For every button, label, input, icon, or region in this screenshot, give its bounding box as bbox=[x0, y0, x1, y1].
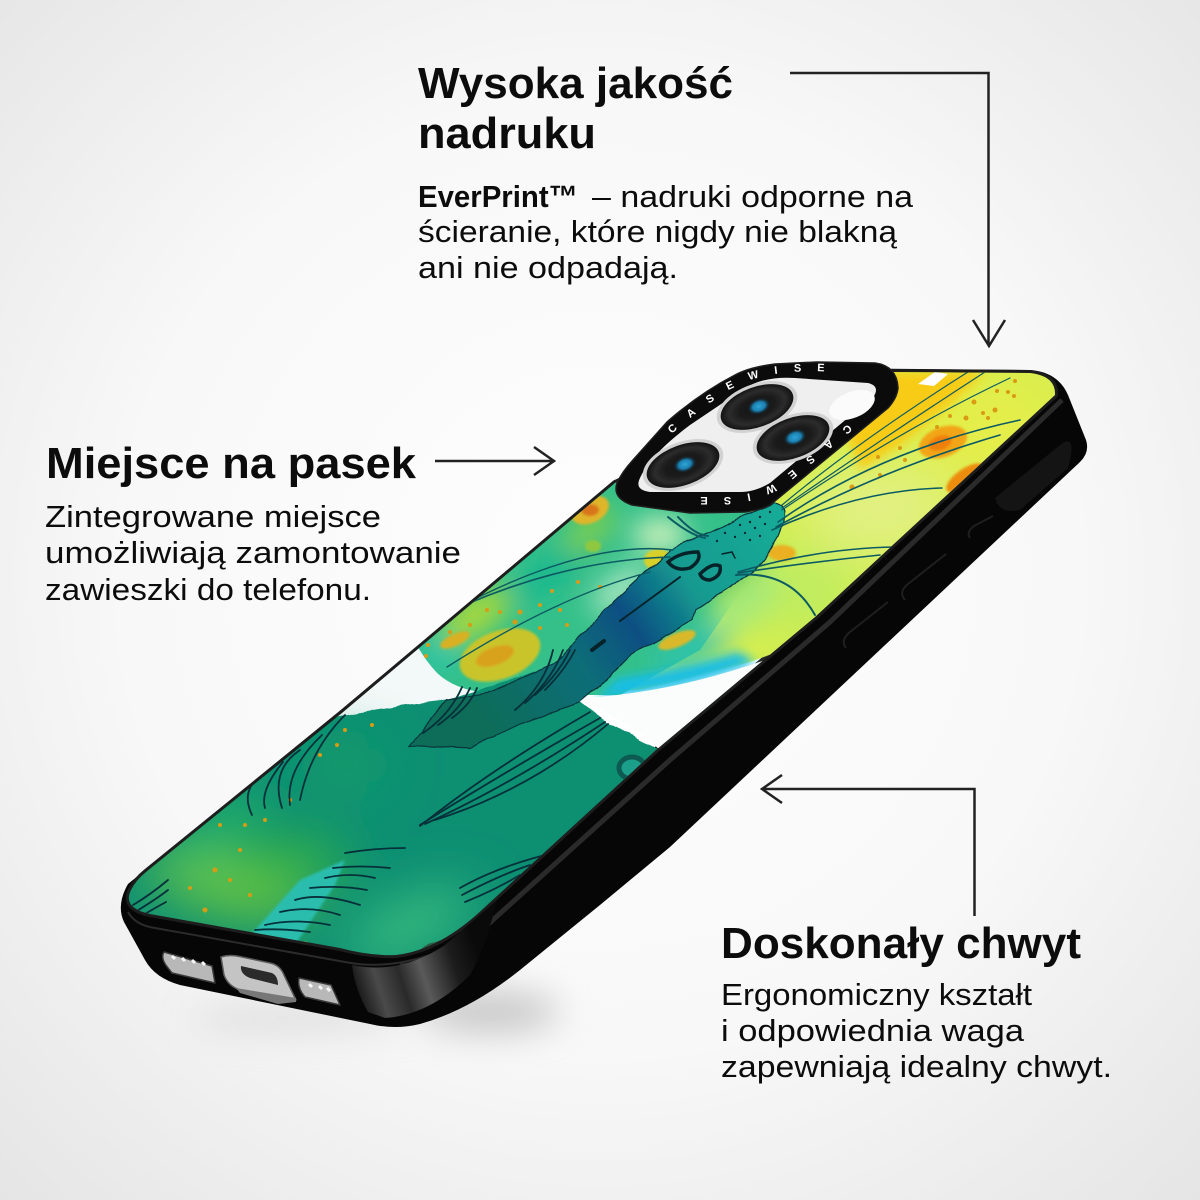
cat eyes and snout bbox=[592, 552, 735, 650]
description: – nadruki odporne na bbox=[592, 179, 914, 214]
eye spot in body bbox=[619, 757, 645, 779]
bottom face edge bbox=[128, 912, 430, 965]
phone bbox=[120, 361, 1088, 1027]
description bbox=[45, 499, 461, 607]
orange spots bbox=[438, 419, 988, 692]
top lime area bbox=[629, 372, 1056, 690]
whiskers bbox=[447, 372, 1020, 667]
description: Ergonomiczny kształt bbox=[721, 977, 1032, 1012]
yellow patch bbox=[845, 372, 985, 470]
printed artwork bbox=[120, 365, 1070, 975]
heading bbox=[418, 59, 733, 158]
description: ani nie odpadają. bbox=[418, 250, 678, 285]
phone shadow bbox=[190, 992, 560, 1032]
bumper rim bbox=[129, 372, 1055, 955]
description: umożliwiają zamontowanie bbox=[45, 535, 461, 570]
left speaker bbox=[163, 952, 215, 983]
callout: print quality bbox=[418, 59, 914, 285]
phone case body bbox=[121, 368, 1087, 1027]
arrow: print quality bbox=[790, 73, 1005, 346]
description: EverPrint™ bbox=[418, 179, 578, 214]
flash bbox=[825, 384, 879, 426]
heading: Wysoka jakość bbox=[418, 59, 733, 108]
casewise top lettering: CASEWISE bbox=[668, 364, 824, 432]
turquoise stripe bbox=[248, 860, 345, 945]
side buttons bbox=[844, 442, 1072, 648]
description: zawieszki do telefonu. bbox=[45, 572, 371, 607]
heading: Miejsce na pasek bbox=[46, 439, 417, 488]
callout: strap slot bbox=[45, 439, 461, 607]
glossy corner bbox=[352, 900, 497, 1018]
white gaps bbox=[336, 648, 474, 718]
description: ścieranie, które nigdy nie blakną bbox=[418, 214, 898, 249]
right speaker bbox=[299, 978, 340, 1005]
casewise bottom lettering: CASEWISE bbox=[700, 426, 852, 504]
lens top bbox=[710, 371, 804, 443]
camera bump bbox=[615, 361, 899, 514]
white print gap bbox=[918, 372, 948, 386]
arrow: strap slot bbox=[435, 447, 554, 475]
side highlight bbox=[400, 400, 1062, 966]
lens right bbox=[746, 402, 840, 474]
fur strokes bbox=[133, 650, 608, 932]
description: i odpowiednia waga bbox=[721, 1013, 1025, 1048]
description: Zintegrowane miejsce bbox=[45, 499, 381, 534]
heading: Doskonały chwyt bbox=[721, 919, 1081, 968]
cyan ear edge bbox=[596, 652, 756, 698]
heading: nadruku bbox=[418, 109, 596, 158]
left ear wash bbox=[418, 482, 752, 695]
arrow: perfect grip bbox=[762, 775, 974, 916]
description bbox=[418, 179, 914, 285]
cat neck and head bbox=[410, 503, 785, 748]
head freckles bbox=[716, 511, 771, 542]
description bbox=[721, 977, 1112, 1084]
charging port bbox=[221, 956, 296, 1004]
description: zapewniają idealny chwyt. bbox=[721, 1049, 1112, 1084]
lens left bbox=[636, 429, 730, 501]
callout: perfect grip bbox=[721, 919, 1112, 1084]
dots bbox=[188, 379, 1017, 912]
yellow bottom strip bbox=[298, 940, 308, 942]
camera window bbox=[638, 378, 876, 492]
body wash bbox=[120, 670, 660, 965]
